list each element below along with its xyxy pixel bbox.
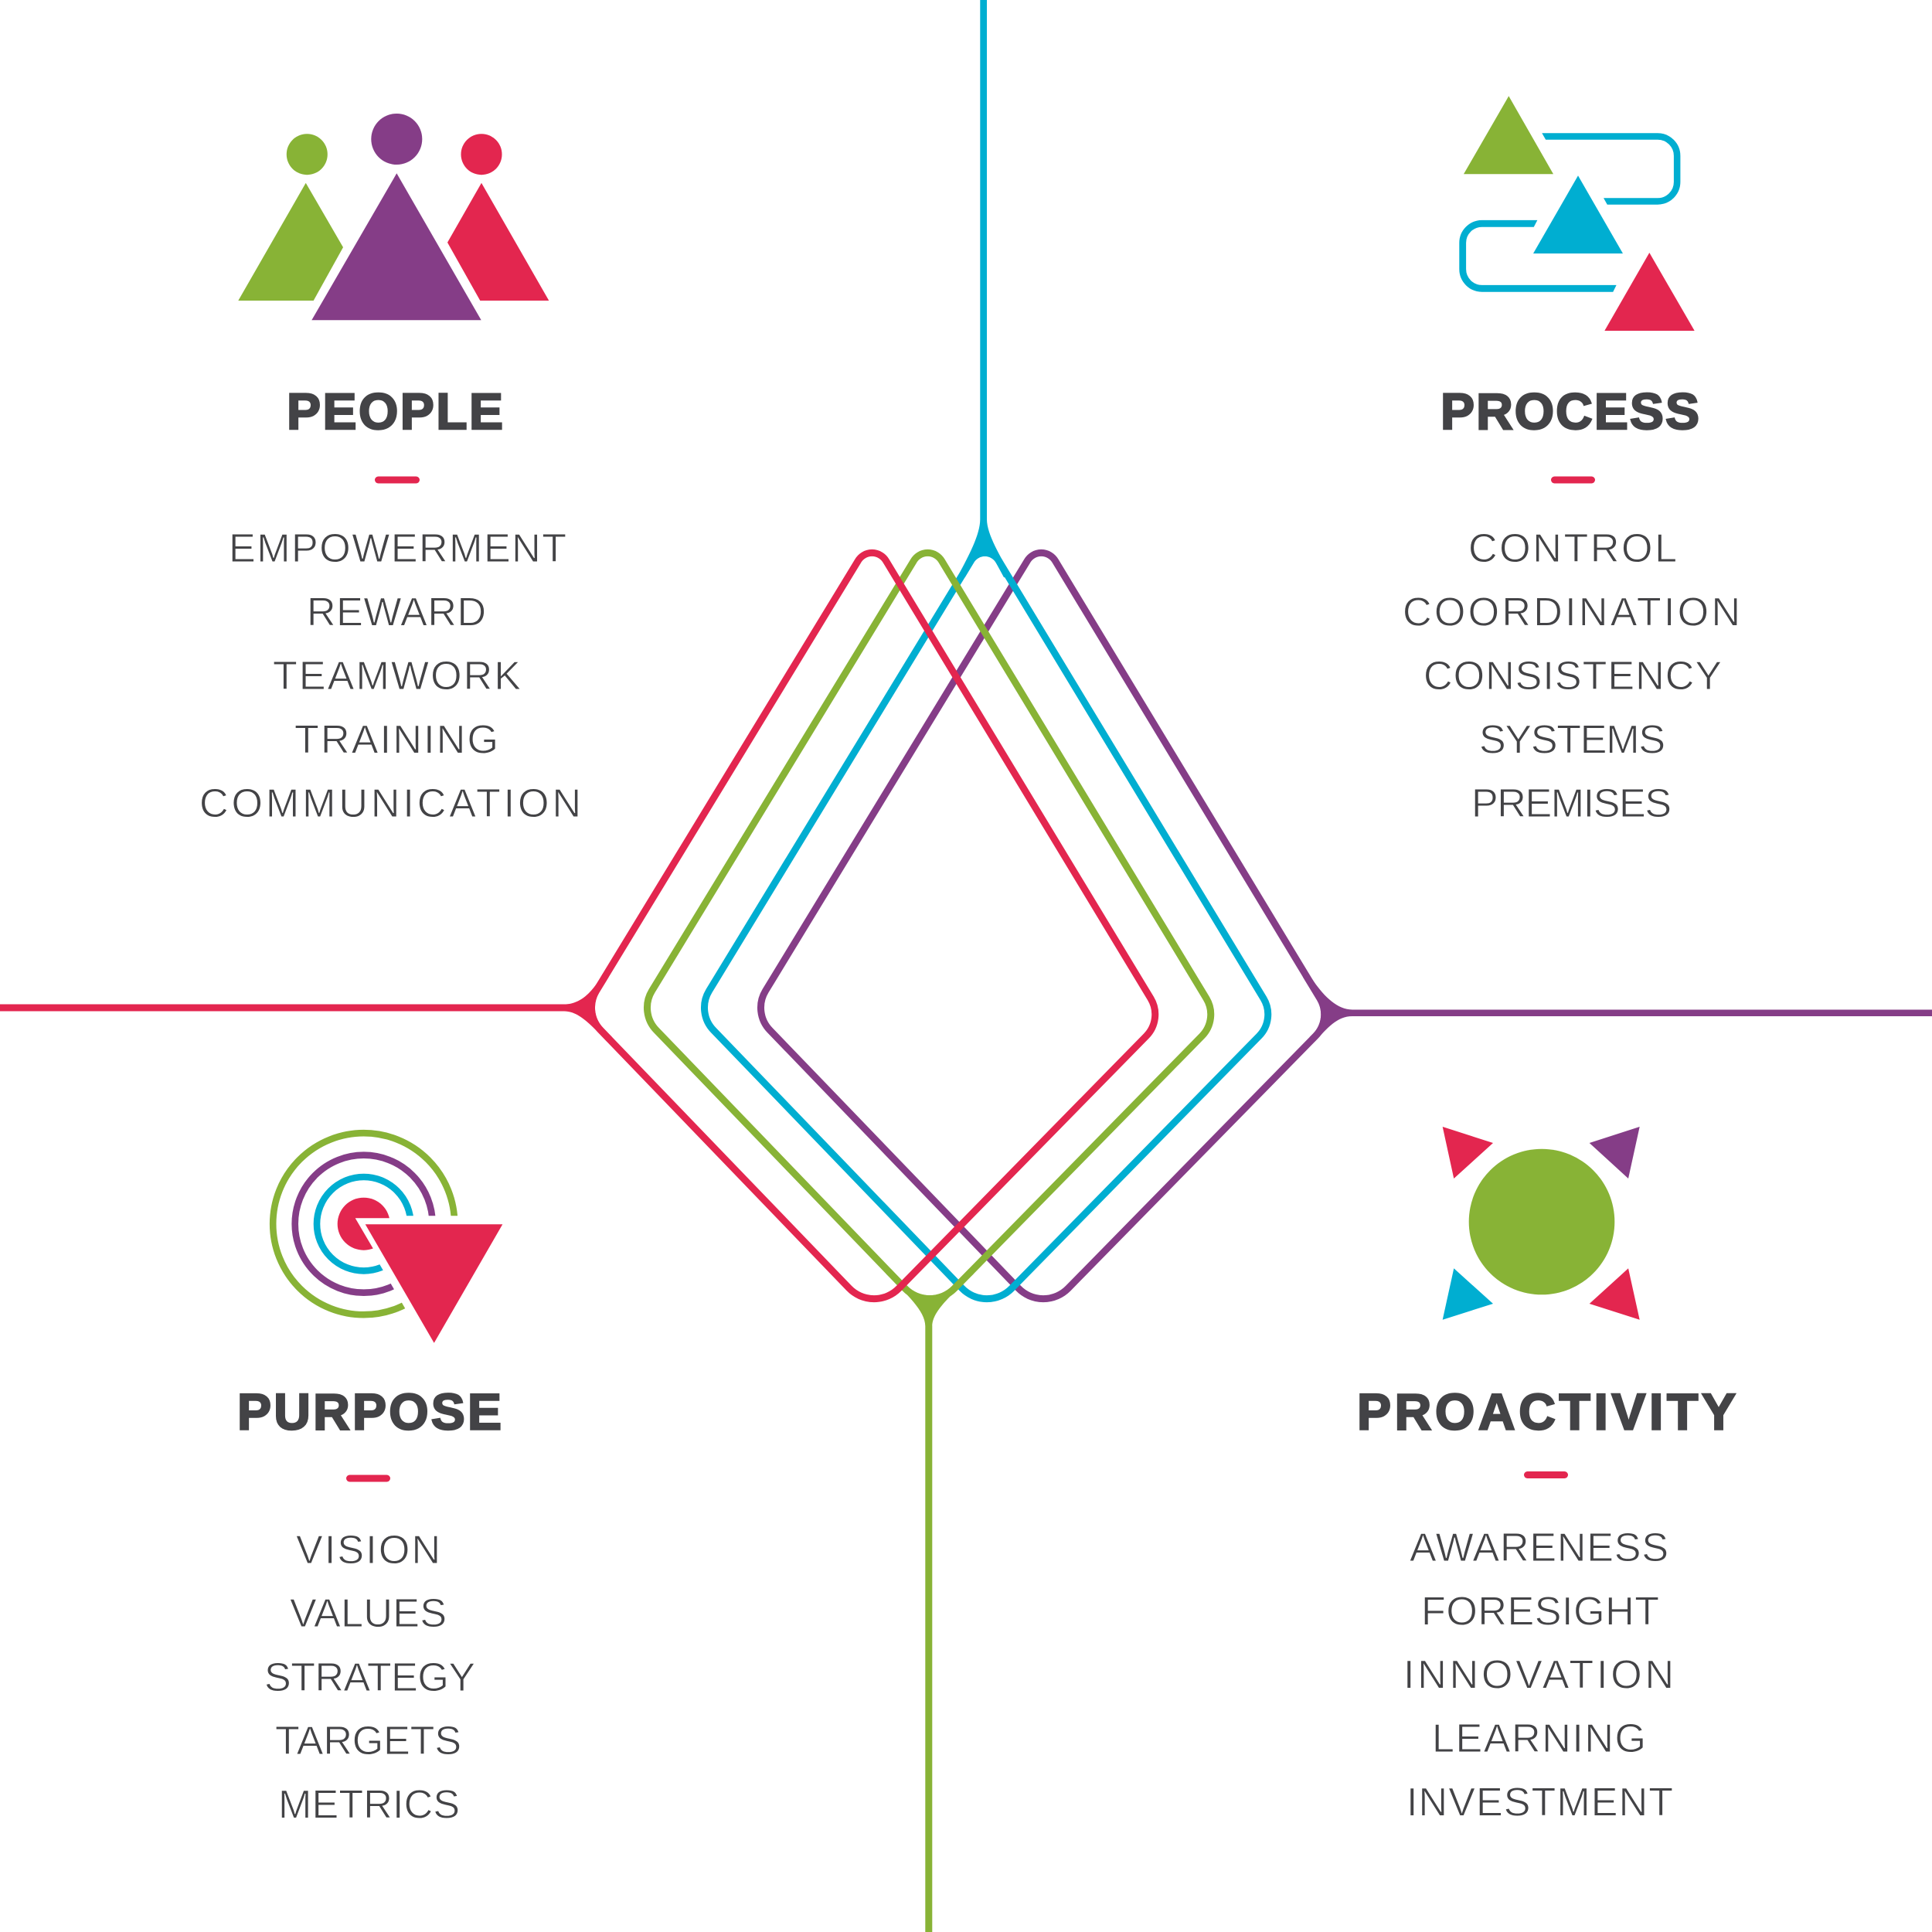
panel: proactivity bbox=[1357, 1383, 1736, 1825]
icon: proactivity bbox=[1443, 1127, 1640, 1320]
list: people: COMMUNICATION bbox=[199, 781, 581, 826]
list: people: TEAMWORK bbox=[273, 654, 521, 699]
green diamond with bottom connector bbox=[647, 553, 1211, 1932]
divider: process bbox=[1551, 476, 1595, 484]
heading: people: PEOPLE bbox=[287, 383, 503, 440]
list: purpose: VALUES bbox=[290, 1591, 447, 1636]
icon: people bbox=[238, 114, 549, 320]
divider: proactivity bbox=[1524, 1471, 1568, 1478]
red diamond with left connector bbox=[0, 553, 1155, 1299]
panel: purpose bbox=[237, 1383, 502, 1827]
divider: purpose bbox=[346, 1475, 390, 1482]
list: people: TRAINING bbox=[294, 717, 498, 762]
list: proactivity: LEARNING bbox=[1432, 1716, 1646, 1761]
purple diamond with right connector bbox=[760, 553, 1932, 1299]
list: process: CONTROL bbox=[1468, 526, 1677, 571]
list: process: PREMISES bbox=[1471, 781, 1672, 826]
list: people: EMPOWERMENT bbox=[229, 526, 566, 571]
panel: people bbox=[199, 383, 581, 826]
list: process bbox=[1403, 526, 1740, 826]
list: process: CONSISTENCY bbox=[1423, 654, 1722, 699]
list: purpose: METRICS bbox=[278, 1782, 460, 1827]
blue diamond with top connector bbox=[704, 0, 1268, 1299]
divider: people bbox=[375, 476, 420, 484]
icon: process bbox=[1460, 96, 1695, 331]
heading: process: PROCESS bbox=[1440, 383, 1699, 440]
heading: purpose: PURPOSE bbox=[237, 1383, 502, 1440]
list: people bbox=[199, 526, 581, 826]
heading: proactivity: PROACTIVITY bbox=[1357, 1383, 1736, 1440]
list: process: SYSTEMS bbox=[1479, 717, 1665, 762]
list: proactivity: FORESIGHT bbox=[1421, 1589, 1659, 1634]
list: purpose: STRATEGY bbox=[264, 1655, 475, 1700]
list: people: REWARD bbox=[307, 590, 486, 635]
list: proactivity bbox=[1403, 1526, 1674, 1825]
list: proactivity: AWARENESS bbox=[1410, 1526, 1668, 1570]
list: proactivity: INVESTMENT bbox=[1406, 1781, 1673, 1825]
list: purpose: VISION bbox=[296, 1528, 440, 1573]
panel: process bbox=[1403, 383, 1740, 826]
list: proactivity: INNOVATION bbox=[1403, 1653, 1674, 1698]
list: process: COORDINATION bbox=[1403, 590, 1740, 635]
list: purpose bbox=[264, 1528, 475, 1827]
icon: purpose bbox=[273, 1133, 556, 1391]
list: purpose: TARGETS bbox=[275, 1719, 461, 1764]
